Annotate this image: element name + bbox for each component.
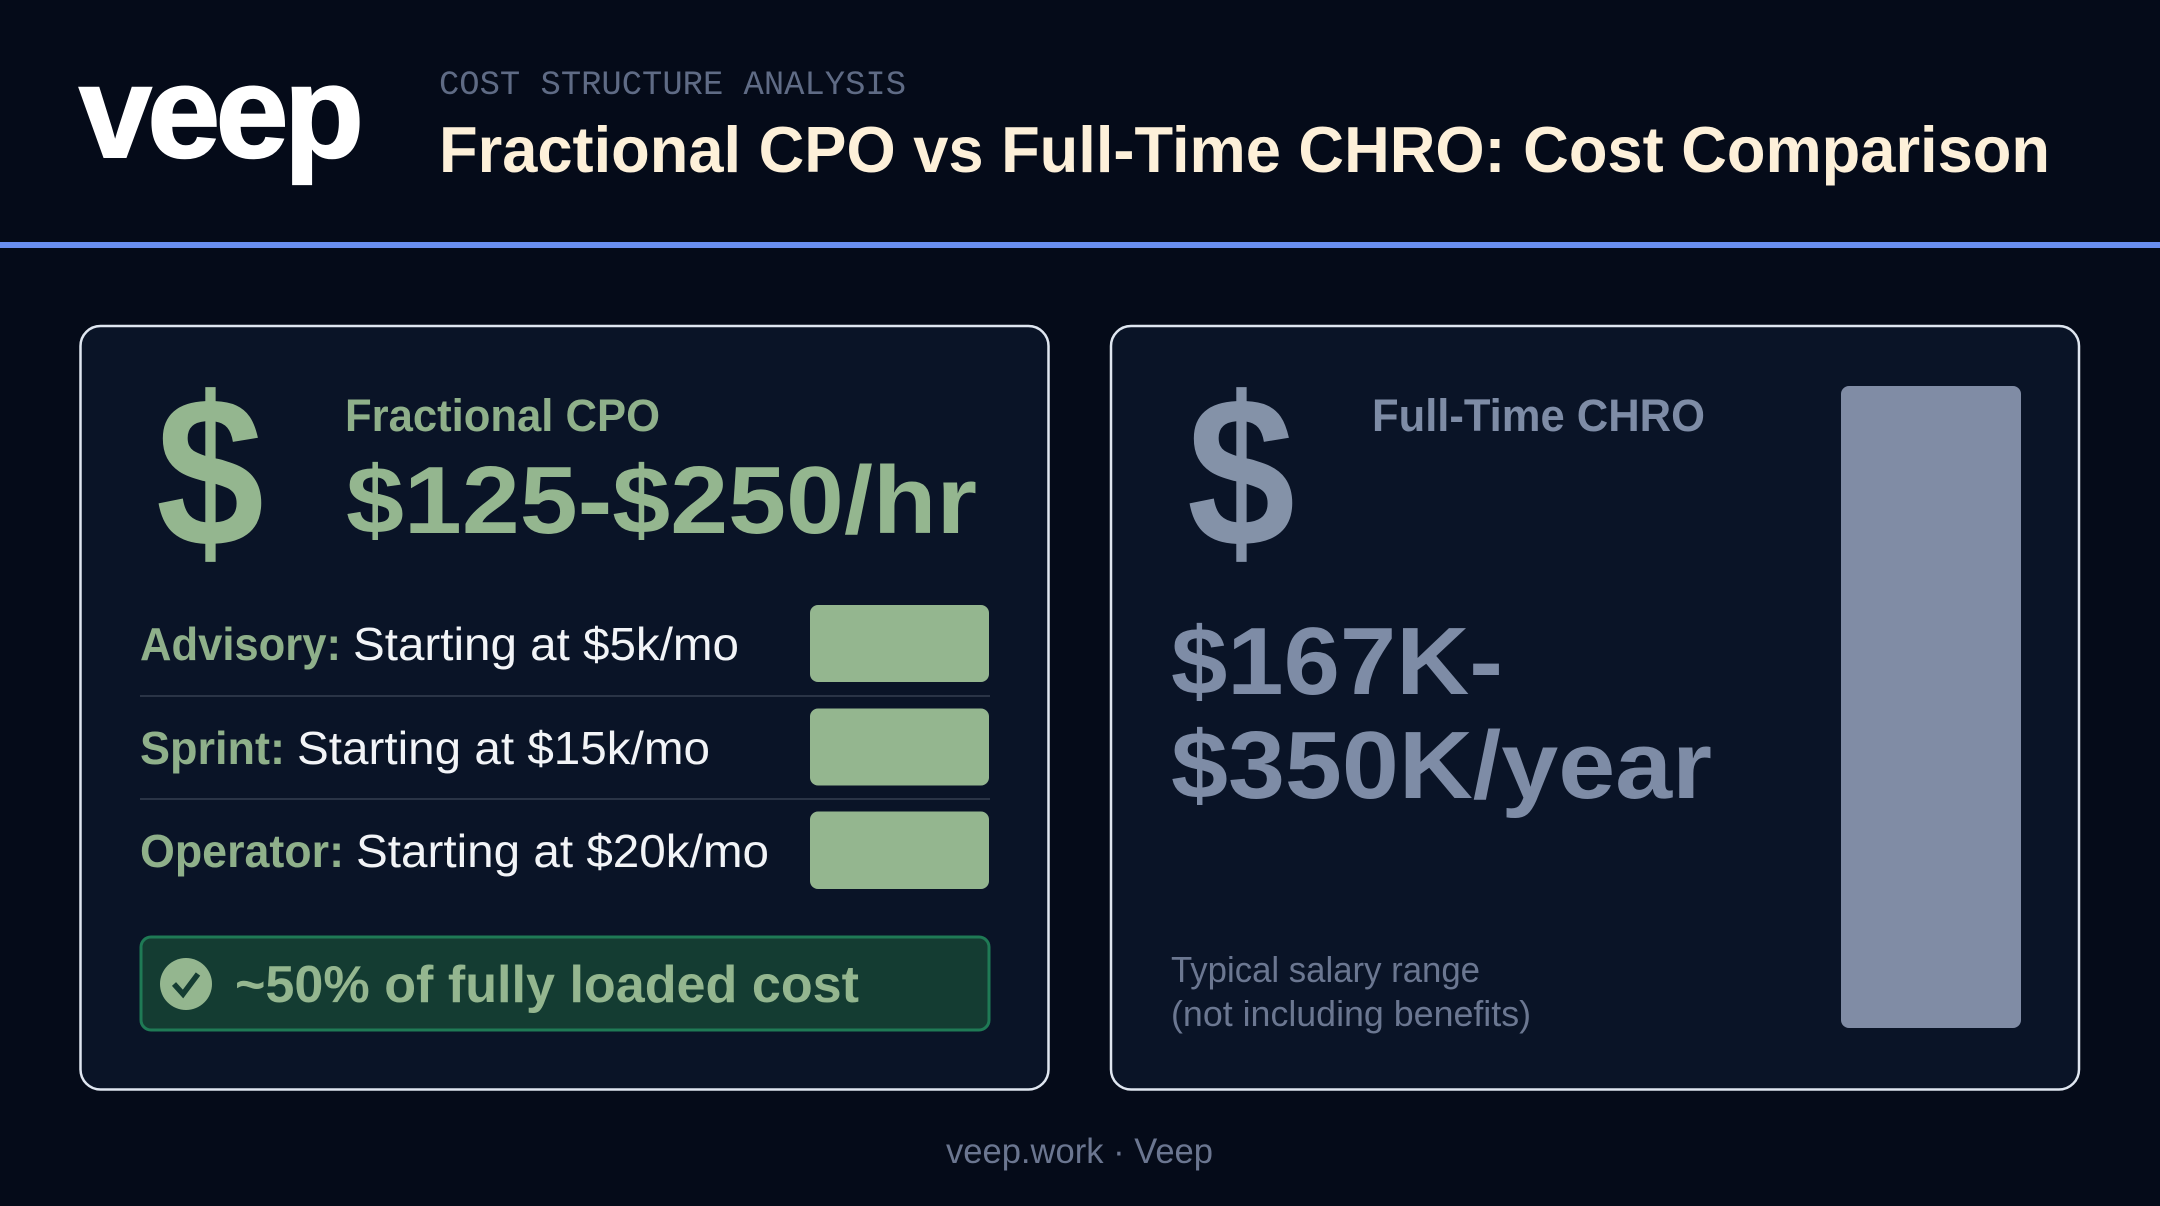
logo: veep: veep	[79, 38, 364, 185]
callout: 50% of cost: ~50% of fully loaded cost	[235, 956, 859, 1014]
callout: 50% of cost	[141, 937, 989, 1030]
eyebrow label: COST STRUCTURE ANALYSIS	[439, 67, 906, 105]
row: advisory	[140, 605, 989, 682]
icon: dollar sign: $	[1187, 353, 1295, 592]
annual salary: $350K/year	[1171, 712, 1712, 819]
row: sprint: Starting at $15k/mo	[297, 722, 710, 774]
row: operator: Starting at $20k/mo	[356, 825, 769, 877]
row: sprint	[140, 708, 989, 786]
header	[79, 38, 2050, 186]
salary note: (not including benefits)	[1171, 993, 1531, 1034]
title: Fractional CPO vs Full-Time CHRO: Cost Comparison	[439, 113, 2050, 186]
annual salary	[1171, 608, 1712, 819]
row: advisory: Starting at $5k/mo	[353, 618, 739, 670]
salary note: Typical salary range	[1171, 949, 1480, 990]
salary note	[1171, 949, 1531, 1034]
icon: check circle	[160, 958, 212, 1010]
cost bar	[1841, 386, 2021, 1028]
annual salary: $167K-	[1171, 608, 1503, 715]
footer: veep.work · Veep	[946, 1132, 1213, 1171]
panel: fractional CPO	[80, 326, 1048, 1090]
row: sprint: Sprint:	[140, 722, 285, 774]
icon: dollar sign: $	[156, 353, 264, 592]
row: advisory: Advisory:	[140, 618, 341, 670]
row: operator	[140, 812, 989, 889]
card label: Fractional CPO	[345, 390, 660, 441]
hourly price: $125-$250/hr	[346, 447, 977, 554]
header accent line	[0, 242, 2160, 248]
card label: Full-Time CHRO	[1372, 390, 1705, 441]
panel: full-time CHRO	[1111, 326, 2079, 1090]
row: operator: Operator:	[140, 825, 344, 877]
